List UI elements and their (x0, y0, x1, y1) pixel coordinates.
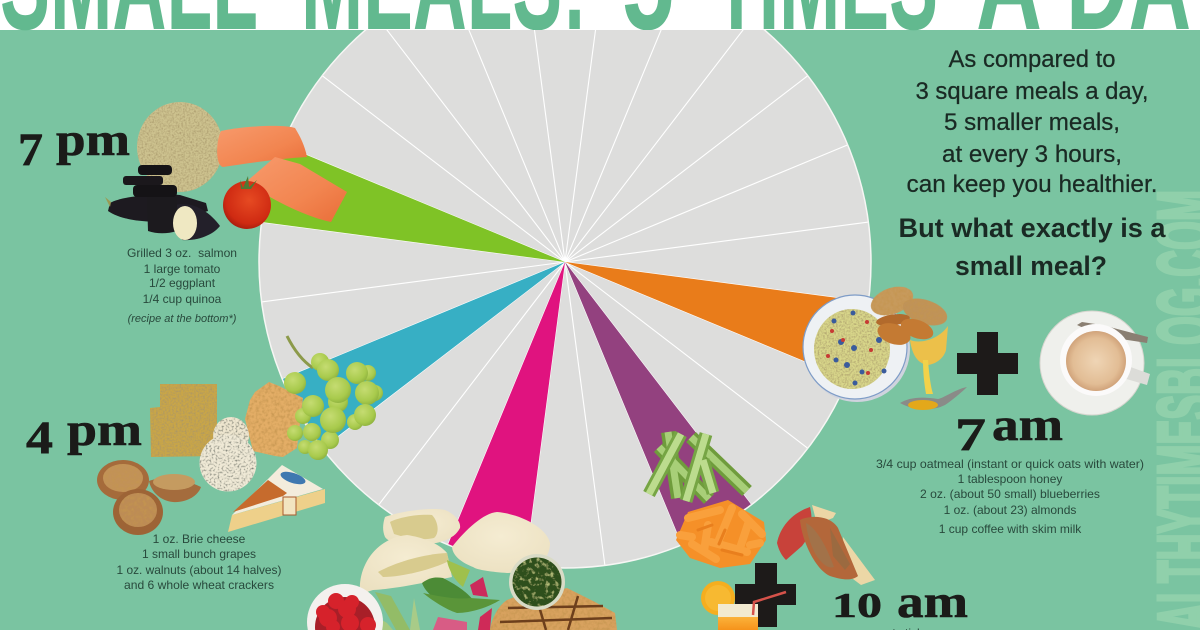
icon: plus sign (735, 563, 796, 627)
heading: 7 pm: pm (56, 114, 130, 166)
icon: salad greens (360, 560, 500, 630)
slice: 1 pm (448, 262, 565, 565)
icon: quinoa (137, 102, 223, 192)
icon: almonds (867, 281, 951, 349)
text: 7 pm meal: 1 large tomato (144, 262, 221, 276)
icon: pesto cup (509, 554, 565, 610)
slice: 7 am (565, 262, 837, 362)
icon: grilled chicken (490, 588, 617, 630)
icon: round crackers (200, 417, 256, 492)
heading: 4 pm: 4 (26, 412, 53, 464)
icon: walnuts (97, 460, 201, 535)
text block: question (898, 213, 1166, 281)
icon: eggplant (105, 165, 220, 240)
icon: tomato (223, 176, 271, 229)
icon: square crackers (150, 384, 217, 457)
text: 4 pm meal: and 6 whole wheat crackers (124, 578, 274, 592)
text: 7 pm meal (127, 246, 237, 325)
icon: honey dipper (900, 326, 967, 410)
heading: 7 am: am (992, 399, 1063, 451)
heading: 7 am (955, 399, 1063, 461)
icon: orange slice (701, 581, 735, 615)
text: 7 am meal (876, 457, 1144, 536)
icon: celery sticks (649, 432, 747, 501)
food: 4 pm snack (97, 336, 383, 535)
text: 7 pm meal: (recipe at the bottom*) (128, 313, 237, 325)
text: 4 pm meal: 1 small bunch grapes (142, 547, 256, 561)
food: 7 am breakfast (803, 281, 1150, 415)
text block: question: But what exactly is a (898, 213, 1166, 243)
icon: pita breads (360, 509, 550, 593)
text block: introduction: 3 square meals a day, (916, 78, 1148, 105)
text block: question: small meal? (955, 251, 1107, 281)
text: 7 am meal: 1 tablespoon honey (958, 472, 1062, 486)
slice: 4 pm (282, 262, 565, 448)
food: 10 am snack (649, 432, 875, 630)
text block: introduction: As compared to (948, 46, 1116, 73)
heading: 7 pm: 7 (18, 124, 43, 176)
text: 7 am meal: 1 cup coffee with skim milk (939, 522, 1082, 536)
icon: baby carrots (676, 500, 766, 568)
icon: oatmeal bowl (803, 295, 910, 402)
icon: apple with peanut butter (777, 505, 875, 585)
heading: 4 pm: pm (67, 404, 142, 456)
text block: introduction: 5 smaller meals, (944, 109, 1120, 136)
icon: grapes (284, 336, 383, 460)
heading: 4 pm (26, 404, 142, 464)
slice: 10 am (565, 262, 751, 545)
heading: 10 am (832, 576, 968, 628)
heading: 10 am: 10 (832, 586, 882, 625)
text: 7 pm meal: 1/4 cup quinoa (143, 292, 222, 306)
icon: salmon fillets (217, 126, 347, 222)
heading: 7 pm (18, 114, 130, 176)
text: 7 am meal: 3/4 cup oatmeal (instant or quick oats with water) (876, 457, 1144, 471)
text block: introduction: can keep you healthier. (906, 171, 1158, 198)
icon: brie cheese (228, 465, 325, 532)
heading: 7 am: 7 (955, 409, 986, 461)
icon: coffee cup (1040, 311, 1150, 415)
food: 1 pm lunch (307, 509, 617, 630)
text block: introduction (906, 46, 1158, 198)
heading: 10 am: am (897, 576, 968, 628)
text: 7 am meal: 2 oz. (about 50 small) blueberries (920, 487, 1100, 501)
icon: juice glass (718, 592, 786, 630)
title (0, 0, 1200, 59)
icon: tomato bowl (307, 584, 383, 630)
text: 4 pm meal: 1 oz. Brie cheese (153, 532, 246, 546)
text: 7 pm meal: 1/2 eggplant (149, 276, 216, 290)
text: 7 pm meal: Grilled 3 oz. salmon (127, 246, 237, 260)
icon: plus sign (957, 332, 1018, 395)
icon: rectangular cracker (245, 382, 303, 457)
text: 4 pm meal: 1 oz. walnuts (about 14 halves) (116, 563, 282, 577)
24-hour clock pie chart (259, 0, 871, 568)
food: 7 pm dinner (105, 102, 347, 240)
text: 7 am meal: 1 oz. (about 23) almonds (944, 503, 1076, 517)
text block: introduction: at every 3 hours, (942, 141, 1122, 168)
slice: 7 pm (262, 145, 565, 262)
text: 4 pm meal (116, 532, 282, 592)
